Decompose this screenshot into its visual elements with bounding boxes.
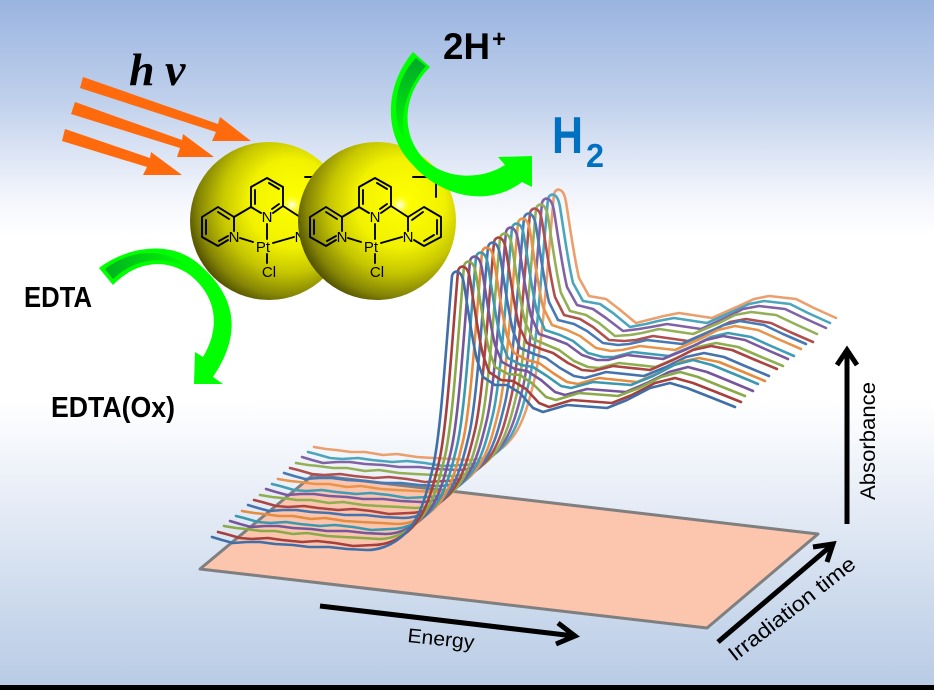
green arrow: EDTA to EDTA(Ox) — [99, 249, 232, 384]
right yellow sphere with Pt complex: Pt — [364, 239, 379, 256]
h nu label: ν — [165, 44, 186, 95]
salmon base plane — [200, 475, 818, 628]
axis label: Absorbance: Absorbance — [857, 382, 880, 500]
label: 2H+: 2H — [443, 26, 490, 67]
label: H2 — [552, 107, 604, 174]
right yellow sphere with Pt complex — [298, 142, 456, 300]
axis arrow: irradiation time — [718, 544, 833, 642]
right yellow sphere with Pt complex: N — [403, 229, 413, 246]
spectra waterfall chart — [212, 190, 836, 550]
right yellow sphere with Pt complex: N — [370, 209, 380, 226]
h nu label: h — [129, 44, 155, 95]
axis arrow: absorbance — [837, 350, 857, 524]
label: plus superscript: + — [492, 26, 506, 53]
green arrow: 2H+ to H2 — [391, 52, 532, 196]
label: EDTA(Ox): EDTA(Ox) — [51, 392, 175, 424]
label: H2: 2 — [586, 137, 604, 174]
left yellow sphere with Pt complex: N — [262, 209, 272, 226]
right yellow sphere with Pt complex: N — [337, 229, 347, 246]
axis label: Irradiation time: Irradiation time — [724, 552, 860, 666]
h nu label — [129, 44, 186, 95]
right yellow sphere with Pt complex: Cl — [370, 264, 384, 281]
label: H2: H — [552, 107, 583, 165]
left yellow sphere with Pt complex: N — [295, 229, 305, 246]
left yellow sphere with Pt complex: Pt — [256, 239, 271, 256]
label: EDTA: EDTA — [24, 282, 92, 314]
bottom black bar — [0, 685, 934, 690]
axis arrow: energy — [320, 606, 575, 644]
axis label: Energy: Energy — [406, 625, 475, 654]
left yellow sphere with Pt complex — [190, 142, 348, 300]
orange light arrows — [62, 77, 251, 175]
left yellow sphere with Pt complex: N — [229, 229, 239, 246]
left yellow sphere with Pt complex: Cl — [262, 264, 276, 281]
